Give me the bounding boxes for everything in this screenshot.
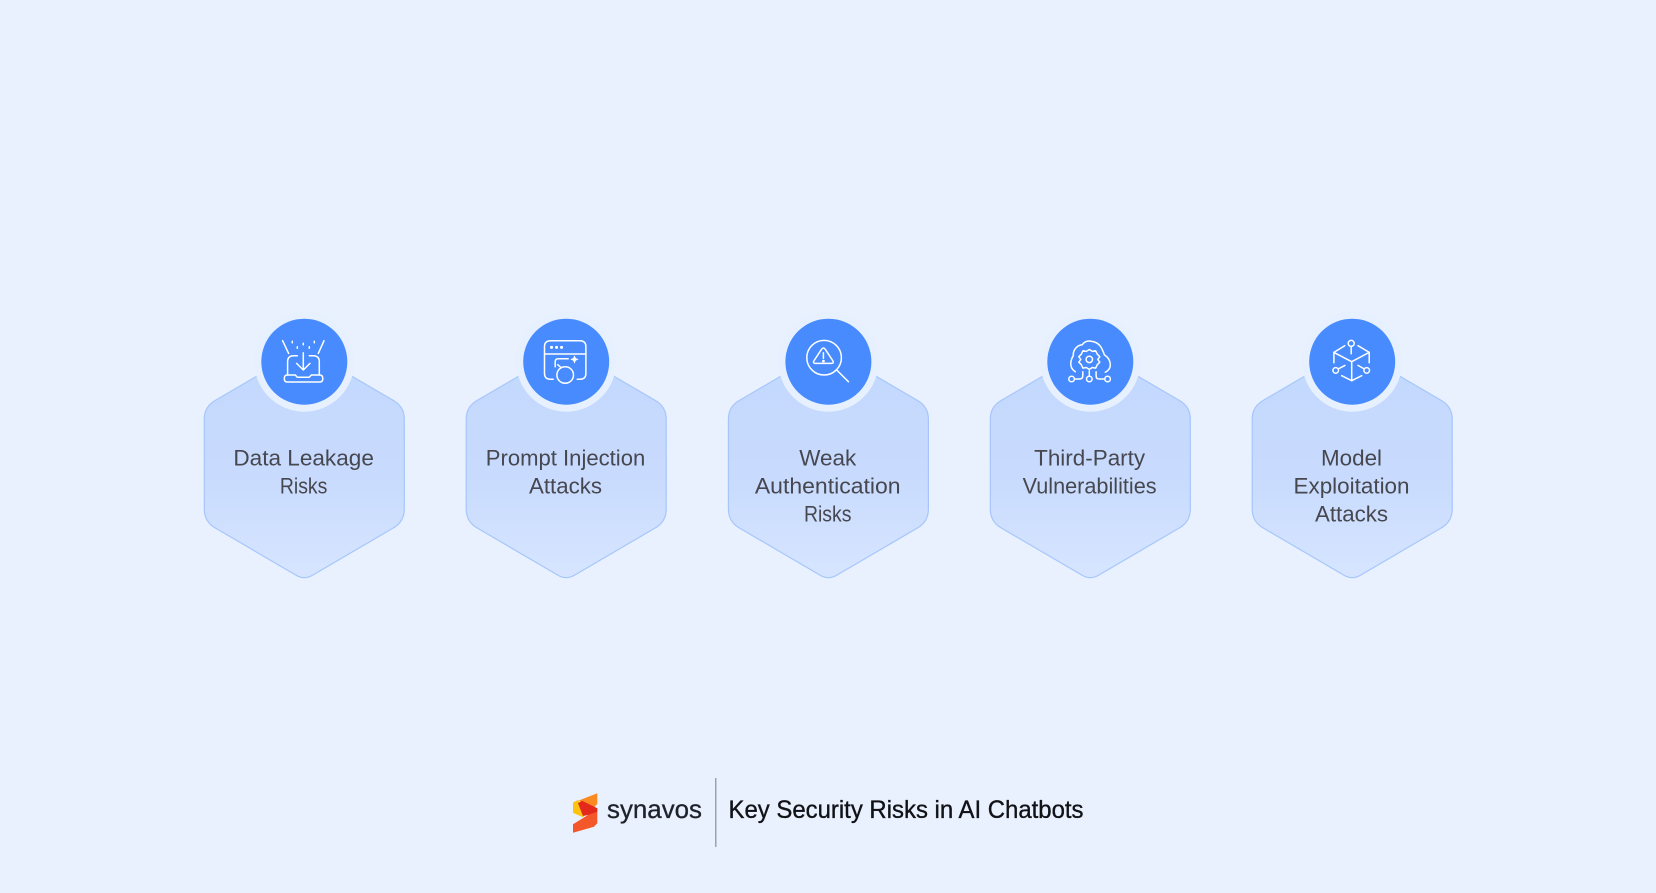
label: Model xyxy=(1321,446,1382,471)
icon badge xyxy=(1309,319,1395,405)
icon badge xyxy=(523,319,609,405)
label: Exploitation xyxy=(1293,474,1409,498)
label xyxy=(755,446,901,526)
label xyxy=(233,446,374,498)
label: Risks xyxy=(804,502,851,526)
icon: magnifier with warning xyxy=(807,340,848,382)
label: Third-Party xyxy=(1034,446,1146,471)
panel: Data Leakage Risks xyxy=(204,312,404,578)
label: Prompt Injection xyxy=(486,446,645,471)
icon halo xyxy=(778,312,878,412)
icon halo xyxy=(1302,312,1402,412)
icon halo xyxy=(1040,312,1140,412)
hexagon card xyxy=(728,348,928,578)
icon: model cube with nodes xyxy=(1333,340,1370,381)
label xyxy=(486,446,645,498)
label: Risks xyxy=(280,474,327,498)
divider xyxy=(715,778,716,847)
footer xyxy=(573,778,1084,847)
label xyxy=(1294,446,1410,526)
label: Weak xyxy=(799,446,857,471)
label: Attacks xyxy=(1315,502,1388,526)
label: Data Leakage xyxy=(233,446,374,471)
hexagon card xyxy=(990,348,1190,578)
label: Vulnerabilities xyxy=(1023,474,1157,498)
icon: cloud gear network xyxy=(1069,341,1110,382)
hexagon card xyxy=(466,348,666,578)
icon badge xyxy=(261,319,347,405)
icon: browser window with injection xyxy=(544,341,586,383)
logo wordmark: synavos xyxy=(607,794,702,824)
icon badge xyxy=(1047,319,1133,405)
icon: synavos logo xyxy=(573,793,597,833)
title: Key Security Risks in AI Chatbots xyxy=(728,796,1084,824)
hexagon card xyxy=(1252,348,1452,578)
panel: Third-Party Vulnerabilities xyxy=(990,312,1190,578)
icon badge xyxy=(785,319,871,405)
panel: Prompt Injection Attacks xyxy=(466,312,666,578)
label xyxy=(1023,446,1157,498)
icon halo xyxy=(516,312,616,412)
icon: laptop download xyxy=(283,341,324,382)
label: Attacks xyxy=(529,474,602,498)
icon halo xyxy=(254,312,354,412)
panel: Model Exploitation Attacks xyxy=(1252,312,1452,578)
label: Authentication xyxy=(755,474,901,498)
hexagon card xyxy=(204,348,404,578)
panel: Weak Authentication Risks xyxy=(728,312,928,578)
